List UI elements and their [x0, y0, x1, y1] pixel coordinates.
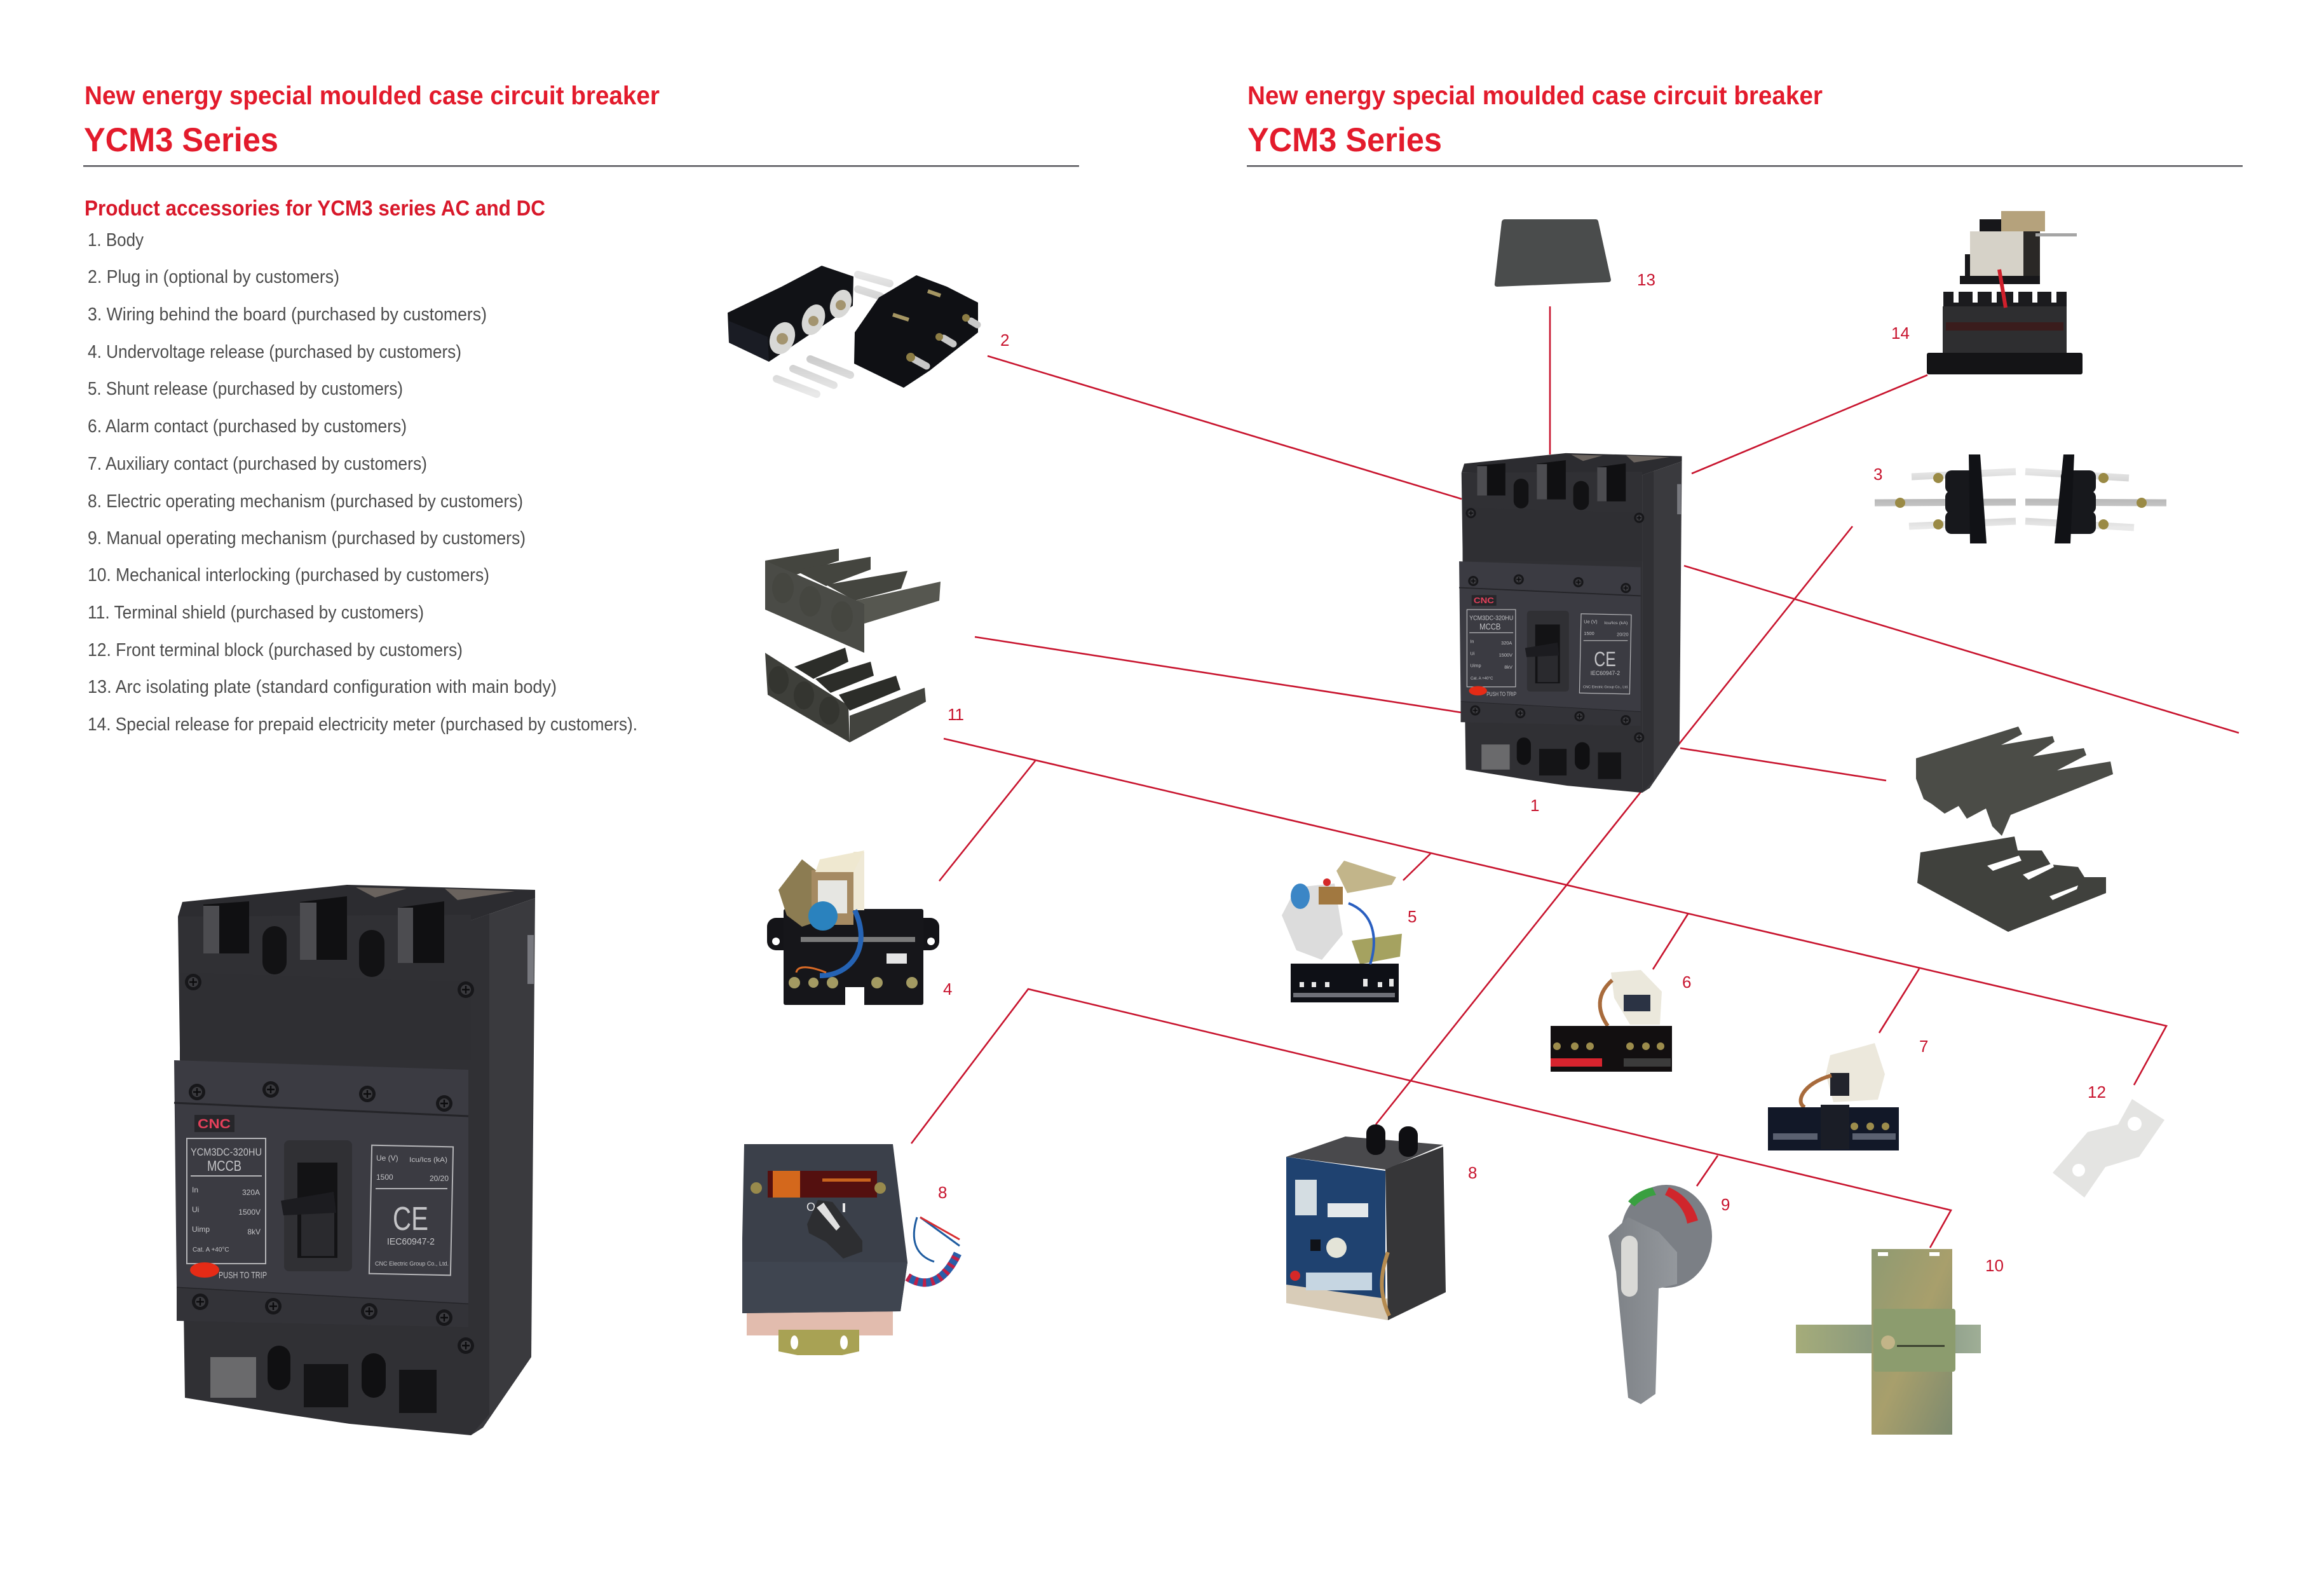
label 10: 10 [1985, 1256, 2004, 1275]
front terminal block 12 [2053, 1099, 2164, 1198]
left title: New energy special moulded case circuit breaker [85, 81, 660, 110]
rating label: 1500V [238, 1208, 261, 1217]
leader lines [911, 306, 2239, 1248]
accessories list: 2. Plug in (optional by customers) [88, 267, 339, 287]
mechanical interlock 10 [1796, 1249, 1981, 1435]
certification label: Icu/Ics (kA) [409, 1156, 447, 1164]
certification label [369, 1145, 453, 1275]
electric operating mechanism accessory 8 left [742, 1144, 960, 1355]
shunt release 5 [1282, 861, 1402, 1002]
rating label: Cat. A +40°C [193, 1246, 229, 1253]
small breaker body 1: 1500 [1584, 631, 1594, 636]
manual operating handle 9 [1608, 1185, 1712, 1404]
accessories list: 8. Electric operating mechanism (purchased by customers) [88, 491, 523, 512]
arc isolating plate 13 [1495, 219, 1611, 287]
label 14: 14 [1891, 324, 1910, 343]
label 6: 6 [1682, 973, 1691, 992]
small breaker body 1: Uimp [1470, 663, 1481, 669]
certification label: CE [393, 1201, 428, 1238]
right series heading: YCM3 Series [1247, 121, 1442, 159]
large breaker photo [174, 885, 535, 1435]
toggle handle [281, 1140, 352, 1271]
rating label [187, 1138, 266, 1264]
special release 14 [1927, 211, 2083, 374]
rating label: In [192, 1185, 198, 1194]
terminal shield accessory 11 [765, 549, 941, 742]
left header rule [83, 165, 1079, 167]
front terminal shield right [1916, 727, 2113, 932]
accessories list: 13. Arc isolating plate (standard configuration with main body) [88, 677, 557, 697]
label 13: 13 [1637, 270, 1655, 289]
right page header [1247, 81, 2243, 167]
small breaker body 1: CNC [1474, 596, 1494, 605]
label 8 right: 8 [1468, 1163, 1477, 1182]
small breaker body 1: YCM3DC-320HU [1469, 615, 1513, 622]
small breaker body 1: MCCB [1479, 622, 1500, 632]
small breaker body 1: 320A [1501, 640, 1512, 646]
certification label: IEC60947-2 [387, 1236, 435, 1247]
wiring behind board 3 [1875, 454, 2166, 543]
accessories list: 14. Special release for prepaid electricity meter (purchased by customers). [88, 714, 637, 735]
left series heading: YCM3 Series [84, 121, 278, 159]
label 12: 12 [2088, 1082, 2106, 1102]
label 9: 9 [1721, 1195, 1730, 1214]
plug in accessory [728, 266, 978, 394]
brand plate [194, 1115, 234, 1132]
accessories list: 7. Auxiliary contact (purchased by customers) [88, 454, 427, 474]
undervoltage release accessory 4 [767, 850, 939, 1005]
push to trip button [190, 1262, 267, 1281]
electric operating mechanism accessory 8 left: O [806, 1201, 815, 1213]
right title: New energy special moulded case circuit breaker [1247, 81, 1823, 110]
rating label: Uimp [192, 1225, 210, 1234]
left page header [83, 81, 1079, 167]
accessories list [88, 230, 637, 735]
label 4: 4 [943, 980, 952, 999]
accessories list: 3. Wiring behind the board (purchased by customers) [88, 304, 487, 325]
rating label: 320A [242, 1188, 260, 1197]
label 3: 3 [1873, 465, 1882, 484]
small breaker body 1 [1459, 453, 1682, 793]
rating label: MCCB [207, 1157, 241, 1174]
accessories list: 10. Mechanical interlocking (purchased by customers) [88, 565, 489, 585]
small breaker body 1: CNC Electric Group Co., Ltd. [1583, 685, 1629, 689]
accessories list: 4. Undervoltage release (purchased by customers) [88, 342, 461, 362]
small breaker body 1: 20/20 [1617, 631, 1629, 637]
accessories list: 9. Manual operating mechanism (purchased by customers) [88, 528, 526, 549]
accessories list: 1. Body [88, 230, 144, 250]
right header rule [1247, 165, 2243, 167]
accessories list: 6. Alarm contact (purchased by customers) [88, 416, 407, 437]
label 7: 7 [1919, 1037, 1928, 1056]
accessories list: 5. Shunt release (purchased by customers) [88, 379, 403, 399]
accessories list: 11. Terminal shield (purchased by customers) [88, 603, 424, 623]
certification label: CNC Electric Group Co., Ltd. [375, 1260, 449, 1267]
certification label: 1500 [376, 1173, 393, 1182]
label 5: 5 [1408, 907, 1417, 926]
accessories list: 12. Front terminal block (purchased by customers) [88, 640, 463, 660]
small breaker body 1: IEC60947-2 [1591, 670, 1620, 676]
small breaker body 1: 8kV [1504, 664, 1512, 670]
push to trip button: PUSH TO TRIP [219, 1270, 267, 1281]
small breaker body 1: Icu/Ics (kA) [1604, 621, 1627, 625]
auxiliary contact 7 [1768, 1043, 1899, 1150]
electric operating mechanism 8 right [1286, 1124, 1446, 1320]
small breaker body 1: Cat. A +40°C [1471, 676, 1493, 681]
label 2: 2 [1000, 331, 1009, 350]
small breaker body 1: Ue (V) [1584, 619, 1598, 625]
small breaker body 1: 1500V [1499, 652, 1512, 658]
small breaker body 1: PUSH TO TRIP [1486, 691, 1516, 697]
small breaker body 1: CE [1594, 648, 1616, 671]
brand plate: CNC [198, 1117, 231, 1131]
small breaker body 1: Ui [1470, 651, 1475, 657]
alarm contact 6 [1551, 970, 1672, 1072]
label 1: 1 [1530, 796, 1539, 815]
rating label: YCM3DC-320HU [191, 1146, 262, 1158]
certification label: Ue (V) [376, 1154, 398, 1163]
accessories heading: Product accessories for YCM3 series AC and DC [85, 196, 545, 221]
rating label: Ui [192, 1205, 199, 1214]
label 11: 11 [948, 705, 964, 724]
certification label: 20/20 [430, 1174, 449, 1183]
rating label: 8kV [247, 1227, 261, 1236]
small breaker body 1: In [1470, 638, 1474, 644]
label 8 left: 8 [938, 1183, 947, 1202]
